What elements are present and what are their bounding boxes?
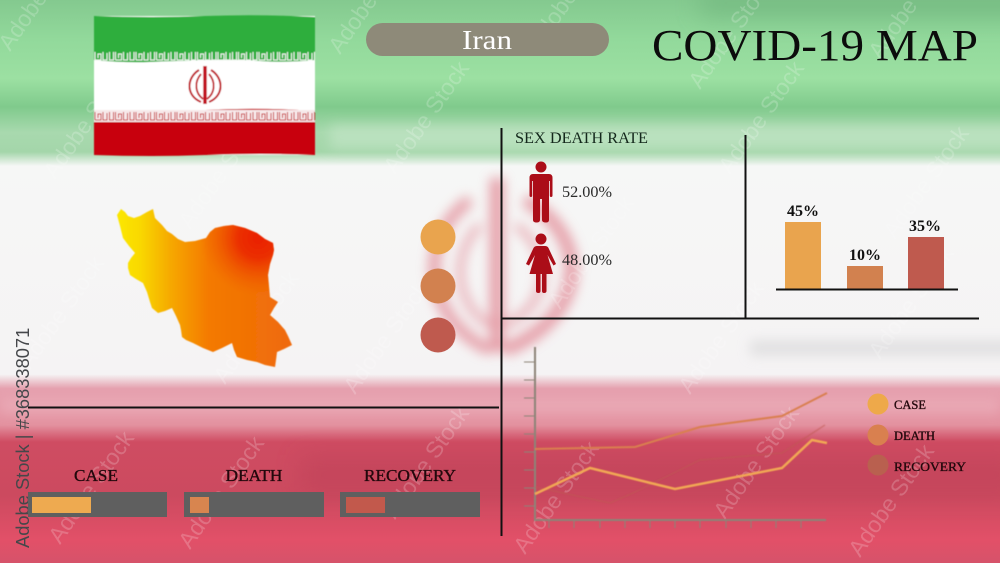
bar chart [776, 203, 958, 290]
case line [535, 440, 827, 494]
watermarks: Adobe Stock [173, 431, 269, 553]
chart axes [524, 347, 826, 528]
map of Iran [117, 209, 292, 367]
watermarks: Adobe Stock [708, 401, 804, 523]
icon: female figure [526, 234, 556, 293]
chart legend [868, 394, 966, 476]
chart legend: RECOVERY [894, 460, 966, 474]
bar chart: 35% [909, 218, 941, 235]
heading: sex death rate: SEX DEATH RATE [515, 130, 648, 147]
country name pill: Iran [462, 25, 513, 55]
watermarks: Adobe Stock [543, 191, 639, 313]
stat: case: CASE [74, 466, 118, 485]
watermarks: Adobe Stock [843, 439, 939, 561]
divider lines [28, 128, 979, 536]
watermarks: Adobe Stock [378, 401, 474, 523]
watermarks: Adobe Stock [378, 56, 474, 178]
bar chart: 45% [787, 203, 819, 220]
chart legend: CASE [894, 398, 926, 412]
legend circles beside map [420, 220, 456, 352]
stat: death: DEATH [226, 466, 282, 485]
watermarks: Adobe Stock [38, 61, 134, 183]
recovery line [535, 425, 825, 503]
female percentage: 48.00% [562, 252, 612, 269]
stat: recovery: RECOVERY [364, 466, 456, 485]
male percentage: 52.00% [562, 184, 612, 201]
watermarks: Adobe Stock [208, 266, 304, 388]
panel: sex death rate [515, 130, 648, 293]
watermarks: Adobe Stock [13, 251, 109, 373]
watermarks: Adobe Stock [338, 276, 434, 398]
title: COVID-19 MAP [652, 21, 978, 70]
flag emblem [189, 66, 221, 104]
watermarks: Adobe Stock [878, 121, 974, 243]
stat: death [184, 466, 324, 517]
icon: male figure [530, 162, 552, 222]
stat: recovery [340, 466, 480, 517]
watermarks: Adobe Stock [673, 276, 769, 398]
watermarks: Adobe Stock [173, 111, 269, 233]
stat: case [28, 466, 167, 517]
watermarks: Adobe Stock [713, 56, 809, 178]
watermarks: Adobe Stock [863, 241, 959, 363]
bar chart: 10% [849, 247, 881, 264]
line chart [524, 347, 827, 528]
background emblem (blurred) [434, 178, 572, 352]
watermarks: Adobe Stock [508, 436, 604, 558]
flag of Iran [94, 15, 315, 156]
chart legend: DEATH [894, 429, 935, 443]
death line [535, 393, 827, 449]
stock id vertical label: Adobe Stock | #368338071 [12, 328, 33, 548]
country name pill [366, 23, 609, 56]
watermarks: Adobe Stock [43, 426, 139, 548]
